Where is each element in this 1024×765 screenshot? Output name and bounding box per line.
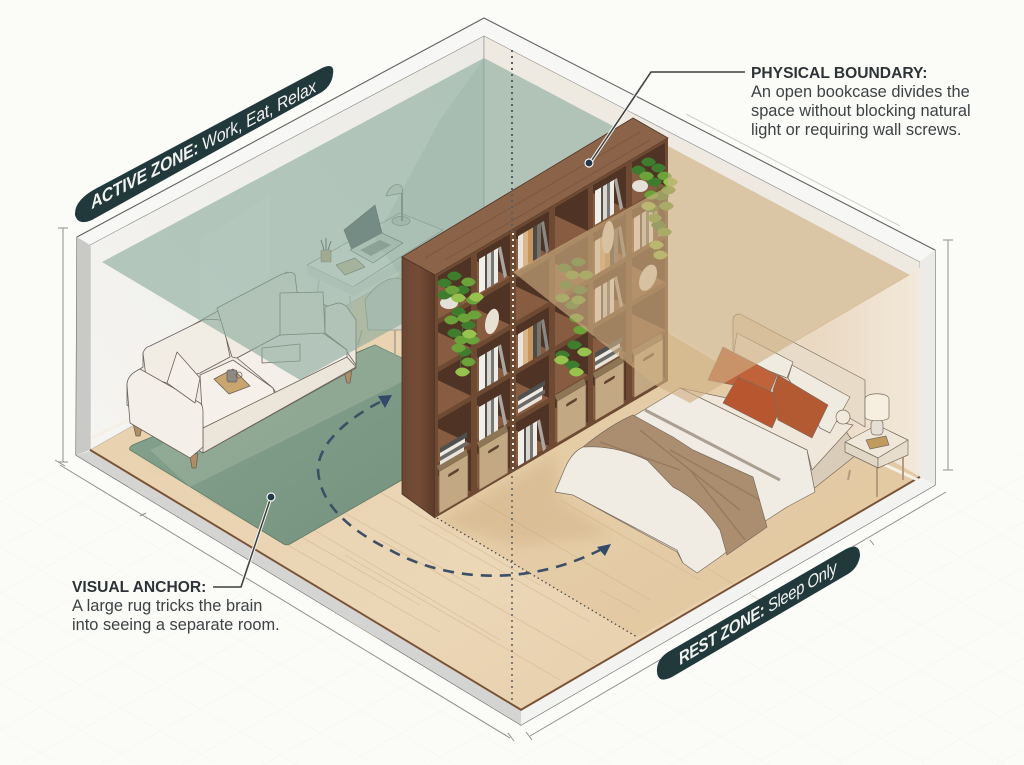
left arm <box>127 369 203 458</box>
bed <box>555 314 908 573</box>
desk <box>307 184 443 355</box>
seat right <box>237 333 347 395</box>
floor dotted line <box>437 518 637 637</box>
terracotta pillow right <box>773 375 828 438</box>
terracotta pillow back <box>708 347 777 392</box>
bolster <box>836 410 850 424</box>
right cut face <box>920 250 935 485</box>
right wall lower <box>670 268 920 477</box>
grain <box>425 132 650 260</box>
background grid <box>0 472 1024 765</box>
side face <box>402 257 435 518</box>
throw texture <box>600 430 760 540</box>
room shell <box>76 18 935 725</box>
bed base <box>573 388 860 563</box>
body: An open bookcase divides the <box>751 83 970 101</box>
nightstand <box>845 425 908 497</box>
baskets <box>437 332 663 515</box>
outer wall footprint <box>76 18 935 725</box>
sofa <box>127 272 356 468</box>
callout: visual anchor <box>72 493 280 634</box>
rug light band <box>150 345 402 487</box>
right wall upper <box>484 36 920 477</box>
plant: left <box>437 272 484 376</box>
books <box>440 152 662 512</box>
window light patch <box>200 195 270 335</box>
leader line <box>213 493 275 587</box>
duvet <box>555 388 815 573</box>
body: space without blocking natural <box>751 102 971 120</box>
rest zone floor tint <box>437 333 920 637</box>
heading: PHYSICAL BOUNDARY: <box>751 65 927 82</box>
notebook <box>336 258 365 275</box>
desk top <box>307 213 443 287</box>
throw blanket <box>583 415 767 555</box>
zone divider dotted line <box>512 50 513 705</box>
label: rest zone: REST ZONE: Sleep Only <box>677 557 840 669</box>
traffic flow arrow <box>318 395 611 576</box>
back pillow two <box>788 365 850 433</box>
frame <box>435 138 668 518</box>
seat left <box>200 360 275 428</box>
front grid <box>435 138 668 518</box>
body: A large rug tricks the brain <box>72 597 262 615</box>
desk edge <box>307 256 410 296</box>
body: into seeing a separate room. <box>72 616 280 634</box>
body: light or requiring wall screws. <box>751 121 961 139</box>
back cushion right <box>217 272 320 358</box>
leader line <box>585 72 745 167</box>
rug <box>130 345 402 545</box>
desk chair <box>365 278 403 330</box>
baseboards <box>92 333 918 480</box>
laptop keys <box>360 240 391 256</box>
wall shadow on green plane <box>375 58 484 275</box>
heading: VISUAL ANCHOR: <box>72 579 206 596</box>
duvet fold <box>645 410 780 480</box>
mattress <box>680 388 853 470</box>
floor <box>90 228 920 710</box>
dimension lines <box>55 114 953 741</box>
pillow left <box>167 352 200 403</box>
tray and mug <box>214 369 250 394</box>
plant: centre <box>554 258 594 376</box>
vases <box>485 192 657 386</box>
open book <box>262 344 300 363</box>
front right slab <box>521 478 935 725</box>
bookcase <box>402 118 678 518</box>
top face <box>402 118 668 275</box>
arrowhead top <box>378 395 392 408</box>
terracotta pillow front <box>723 377 785 428</box>
back pillow one <box>733 333 793 378</box>
arrowhead bottom <box>597 544 611 556</box>
table lamp <box>865 394 889 435</box>
shelf cells <box>438 143 665 511</box>
right arm <box>325 303 356 365</box>
floor planks <box>150 405 760 680</box>
desk legs <box>315 280 350 315</box>
desk lamp <box>386 184 410 226</box>
sofa front <box>203 357 356 453</box>
sofa frame <box>127 272 356 453</box>
left wall <box>90 36 484 450</box>
rest zone tan plane <box>513 146 910 403</box>
back cushion left <box>143 319 230 383</box>
left cut face <box>76 237 90 455</box>
plant: top right <box>631 158 678 260</box>
floor front edge <box>90 450 920 710</box>
label: active zone: ACTIVE ZONE: Work, Eat, Relax <box>88 75 319 213</box>
callout: physical boundary <box>585 65 971 167</box>
active zone green plane <box>102 58 668 380</box>
headboard <box>733 314 865 427</box>
laptop screen <box>344 205 382 250</box>
pen cup <box>321 238 331 262</box>
sofa legs <box>133 369 352 468</box>
laptop base <box>350 233 403 263</box>
floor shadows <box>150 440 610 545</box>
front floor slab <box>76 451 521 725</box>
pillow right <box>280 292 325 335</box>
label: rest zone <box>657 547 860 680</box>
